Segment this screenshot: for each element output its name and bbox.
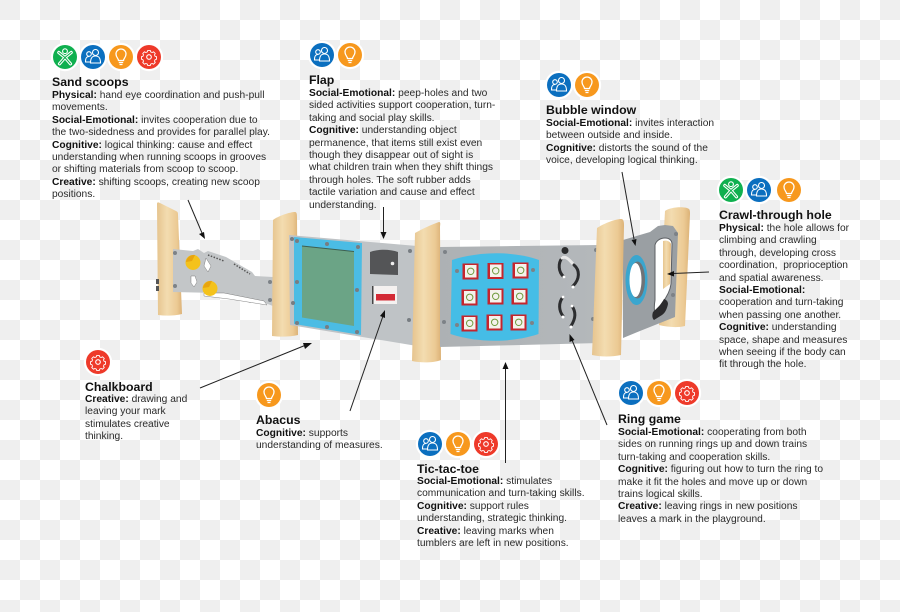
text block bbox=[618, 427, 823, 525]
arrow: crawl-through hole bbox=[667, 271, 709, 276]
callout: ring game bbox=[618, 379, 823, 525]
text block: when seeing if the body can bbox=[719, 347, 846, 358]
heading: Sand scoops bbox=[52, 75, 129, 89]
text block: positions. bbox=[52, 189, 95, 200]
text block: Social-Emotional: peep-holes and two bbox=[309, 88, 487, 99]
icon: creative bbox=[673, 379, 701, 407]
text block bbox=[719, 223, 849, 370]
text block: space, shape and measures bbox=[719, 335, 847, 346]
heading: Crawl-through hole bbox=[719, 208, 832, 222]
text block: climbing and crawling bbox=[719, 235, 817, 246]
text block: Social-Emotional: invites interaction bbox=[546, 118, 714, 129]
icon: social-emotional bbox=[619, 380, 643, 405]
text block: voice, developing logical thinking. bbox=[546, 155, 698, 166]
text block bbox=[85, 394, 187, 442]
text block: understanding when running scoops in grooves bbox=[52, 152, 266, 163]
text block: make it fit the holes and move up or down bbox=[618, 477, 807, 488]
text block bbox=[546, 118, 714, 166]
text block: though they disappear out of sight is bbox=[309, 150, 473, 161]
text block: permanence, that items still exist even bbox=[309, 138, 482, 149]
text block: turn-taking and cooperation skills. bbox=[618, 452, 770, 463]
text block: Physical: hand eye coordination and push-pull bbox=[52, 90, 264, 101]
heading: Flap bbox=[309, 73, 334, 87]
text block: understanding, strategic thinking. bbox=[417, 513, 567, 524]
arrow: abacus bbox=[350, 310, 385, 411]
text block: the two-sidedness and provides for parallel play. bbox=[52, 127, 270, 138]
text block: Creative: leaving marks when bbox=[417, 526, 554, 537]
text block: Cognitive: figuring out how to turn the ring to bbox=[618, 464, 823, 475]
text block bbox=[256, 428, 383, 451]
post 2 bbox=[272, 212, 298, 337]
text block bbox=[309, 88, 495, 211]
text block: Creative: drawing and bbox=[85, 394, 187, 405]
icon: social-emotional bbox=[745, 176, 771, 204]
text block bbox=[417, 476, 585, 549]
callout: tic-tac-toe bbox=[416, 430, 585, 549]
text block: cooperation and turn-taking bbox=[719, 297, 843, 308]
text block: trains logical skills. bbox=[618, 489, 703, 500]
icon: cognitive bbox=[336, 43, 364, 69]
text block: what children train when they shift things bbox=[309, 162, 493, 173]
text block: sides on running rings up and down trains bbox=[618, 439, 807, 450]
heading: Tic-tac-toe bbox=[417, 462, 479, 476]
text block: thinking. bbox=[85, 431, 123, 442]
icon: social-emotional bbox=[309, 41, 336, 69]
text block: communication and turn-taking skills. bbox=[417, 488, 585, 499]
text block: sided activities support cooperation, turn- bbox=[309, 100, 495, 111]
arrow: ring game bbox=[570, 334, 607, 425]
panel: bubble window and crawl-through hole bbox=[623, 225, 678, 338]
arrow: flap bbox=[380, 207, 386, 239]
text block: Social-Emotional: stimulates bbox=[417, 476, 552, 487]
callout: chalkboard bbox=[84, 348, 187, 442]
icon: creative bbox=[472, 432, 500, 458]
icon: creative bbox=[84, 348, 112, 376]
heading: Abacus bbox=[256, 413, 300, 427]
text block: Cognitive: support rules bbox=[417, 501, 529, 512]
heading: Ring game bbox=[618, 412, 681, 426]
text block: Cognitive: logical thinking: cause and effect bbox=[52, 140, 252, 151]
text block bbox=[52, 90, 270, 200]
text block: or shifting materials from scoop to scoop. bbox=[52, 164, 238, 175]
text block: through holes. The soft rubber adds bbox=[309, 175, 471, 186]
text block: understanding. bbox=[309, 200, 377, 211]
text block: between outside and inside. bbox=[546, 130, 673, 141]
text block: Cognitive: understanding object bbox=[309, 125, 457, 136]
arrow: tic-tac-toe bbox=[502, 362, 508, 463]
arrows bbox=[188, 172, 709, 463]
text block: Social-Emotional: invites cooperation due to bbox=[52, 115, 258, 126]
callout: abacus bbox=[256, 381, 383, 451]
text block: taking and social play skills. bbox=[309, 113, 435, 124]
text block: Cognitive: distorts the sound of the bbox=[546, 143, 708, 154]
text block: leaves a mark in the playground. bbox=[618, 514, 766, 525]
icon: physical bbox=[717, 176, 745, 204]
text block: Physical: the hole allows for bbox=[719, 223, 849, 234]
icon: cognitive bbox=[107, 43, 135, 71]
text block: tumblers are left in new positions. bbox=[417, 538, 569, 549]
panel: tic-tac-toe and ring game bbox=[440, 245, 600, 347]
callout: bubble window bbox=[546, 71, 714, 166]
panel: sand scoops bbox=[156, 249, 273, 306]
callout: sand scoops bbox=[51, 43, 270, 200]
text block: movements. bbox=[52, 102, 108, 113]
icon: creative bbox=[135, 45, 163, 71]
panel: chalkboard and flap bbox=[289, 235, 417, 346]
icon: social-emotional bbox=[416, 430, 444, 456]
icon: cognitive bbox=[444, 430, 472, 458]
text block: Cognitive: understanding bbox=[719, 322, 837, 333]
post 5 bbox=[659, 207, 690, 327]
icon: cognitive bbox=[777, 178, 801, 202]
post 3 bbox=[412, 222, 441, 362]
text block: and spatial awareness. bbox=[719, 273, 824, 284]
text block: Creative: leaving rings in new positions bbox=[618, 501, 798, 512]
arrow: sand scoops bbox=[188, 200, 205, 239]
text block: when passing one another. bbox=[719, 310, 841, 321]
text block: coordination, proprioception bbox=[719, 260, 848, 271]
arrow: chalkboard bbox=[200, 343, 312, 388]
heading: Bubble window bbox=[546, 103, 636, 117]
text block: Cognitive: supports bbox=[256, 428, 348, 439]
heading: Chalkboard bbox=[85, 380, 153, 394]
text block: Social-Emotional: bbox=[719, 285, 805, 296]
text block: stimulates creative bbox=[85, 419, 170, 430]
icon: cognitive bbox=[647, 379, 673, 407]
callout: crawl-through hole bbox=[717, 176, 849, 370]
post 1 bbox=[157, 202, 182, 316]
icon: social-emotional bbox=[546, 71, 573, 99]
icon: cognitive bbox=[256, 381, 282, 407]
text block: understanding of measures. bbox=[256, 440, 383, 451]
text block: fit through the hole. bbox=[719, 359, 806, 370]
text block: Social-Emotional: cooperating from both bbox=[618, 427, 807, 438]
icon: cognitive bbox=[573, 71, 601, 97]
icon: social-emotional bbox=[79, 43, 107, 69]
text block: Creative: shifting scoops, creating new scoop bbox=[52, 177, 260, 188]
post 4 bbox=[592, 219, 624, 356]
text block: through, developing cross bbox=[719, 248, 836, 259]
text block: tactile variation and cause and effect bbox=[309, 187, 475, 198]
text block: leaving your mark bbox=[85, 406, 166, 417]
arrow: bubble window bbox=[622, 172, 636, 246]
callout: flap bbox=[309, 41, 495, 211]
icon: physical bbox=[51, 44, 79, 71]
